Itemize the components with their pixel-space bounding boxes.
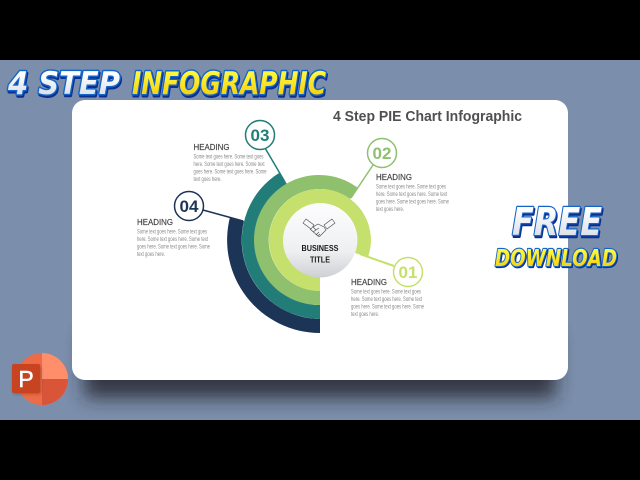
pie chart rings: [227, 173, 371, 333]
text block 04: [137, 217, 210, 258]
text block 02: text goes here.: [376, 206, 404, 213]
background band: [0, 60, 640, 420]
centre circle: [283, 204, 357, 278]
ring 02 green: [254, 175, 358, 305]
text block 02: here. Some text goes here. Some text: [376, 191, 447, 198]
step badge 03: [246, 120, 274, 150]
ring 01 lime: [269, 189, 371, 291]
step badge 02: [368, 138, 396, 168]
free label: FREE: [512, 200, 602, 244]
text block 02: Some text goes here. Some text goes: [376, 184, 446, 190]
text block 04: Some text goes here. Some text goes: [137, 228, 207, 236]
headline: infographic: INFOGRAPHIC: [132, 66, 326, 102]
text block 01: text goes here.: [351, 311, 379, 318]
icon: powerpoint logo: [12, 353, 68, 405]
icon: handshake: [303, 219, 335, 236]
connector 02: [351, 165, 373, 198]
text block 01: [351, 277, 424, 318]
text block 03: HEADING: [194, 142, 230, 152]
connector 03: [265, 148, 285, 182]
centre label line 2: TITLE: [310, 254, 330, 264]
connector 04: [203, 210, 243, 221]
text block 03: goes here. Some text goes here. Some: [194, 168, 267, 176]
text block 01: here. Some text goes here. Some text: [351, 296, 422, 303]
text block 03: [194, 142, 267, 183]
text block 02: [376, 172, 449, 213]
text block 03: here. Some text goes here. Some text: [194, 161, 265, 168]
centre label: BUSINESS: [302, 243, 339, 253]
text block 02: HEADING: [376, 172, 412, 182]
step badge 04: [174, 192, 204, 220]
text block 01: goes here. Some text goes here. Some: [351, 304, 424, 310]
chart title: 4 Step PIE Chart Infographic: [333, 109, 522, 125]
text block 04: here. Some text goes here. Some text: [137, 236, 208, 243]
text block 04: goes here. Some text goes here. Some: [137, 244, 210, 250]
headline: 4 step: 4 STEP: [7, 66, 120, 102]
step badge 01: [394, 258, 422, 286]
step badge 03: 03: [251, 126, 269, 145]
ring 04 navy: [227, 217, 320, 333]
text block 03: Some text goes here. Some text goes: [194, 154, 264, 160]
text block 01: HEADING: [351, 277, 387, 287]
text block 04: text goes here.: [137, 251, 165, 258]
step badge 01: 01: [399, 263, 417, 282]
connector 01: [360, 254, 394, 266]
text block 03: text goes here.: [194, 176, 222, 183]
text block 02: goes here. Some text goes here. Some: [376, 198, 449, 206]
white card panel: [72, 100, 568, 380]
text block 04: HEADING: [137, 217, 173, 227]
step badge 02: 02: [373, 144, 391, 163]
ring 03 teal: [242, 173, 320, 319]
card shadow: [84, 330, 556, 398]
step badge 04: 04: [180, 197, 199, 216]
text block 01: Some text goes here. Some text goes: [351, 288, 421, 296]
icon: powerpoint logo: P: [18, 366, 34, 392]
